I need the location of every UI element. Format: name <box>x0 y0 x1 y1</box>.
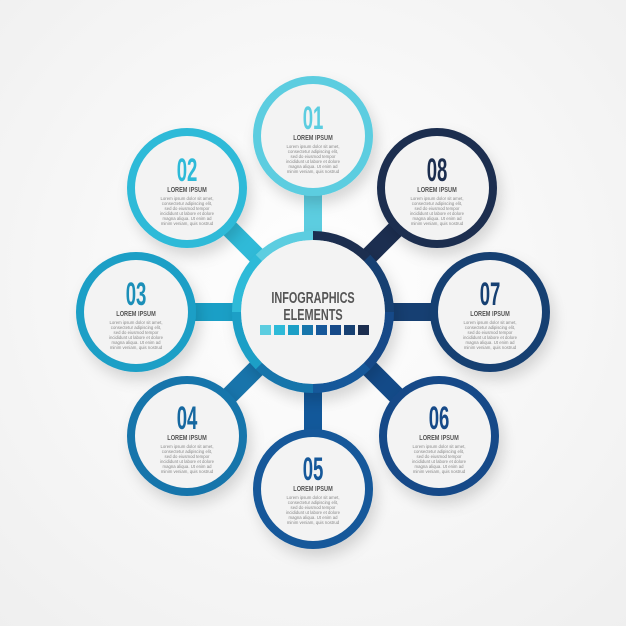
circle 03: magna aliqua. Ut enim ad <box>112 340 161 345</box>
circle 04: consectetur adipiscing elit, <box>162 449 212 454</box>
circle 01: incididunt ut labore et dolore <box>286 159 341 164</box>
circle 04: incididunt ut labore et dolore <box>160 459 215 464</box>
circle 05: sed do eiusmod tempor <box>291 505 336 510</box>
circle 04 <box>127 376 247 496</box>
circle 05: magna aliqua. Ut enim ad <box>289 515 338 520</box>
circle 08: sed do eiusmod tempor <box>415 206 460 211</box>
circle 01 <box>253 76 373 196</box>
segmented ring <box>236 236 390 388</box>
circle 02: minim veniam, quis nostrud <box>161 221 214 226</box>
circle 06: magna aliqua. Ut enim ad <box>415 464 464 469</box>
circle 02: LOREM IPSUM <box>167 186 207 194</box>
color squares <box>260 325 369 335</box>
circle 06: Lorem ipsum dolor sit amet, <box>412 444 466 449</box>
circle 01: LOREM IPSUM <box>293 134 333 142</box>
circle 04: magna aliqua. Ut enim ad <box>163 464 212 469</box>
circle 01: sed do eiusmod tempor <box>291 154 336 159</box>
title: ELEMENTS <box>283 306 343 324</box>
circle 07: minim veniam, quis nostrud <box>464 345 517 350</box>
circle 06: 06 <box>429 400 449 436</box>
circle 03: minim veniam, quis nostrud <box>110 345 163 350</box>
title: INFOGRAPHICS <box>271 289 355 307</box>
circle 03 <box>76 252 196 372</box>
circle 02: incididunt ut labore et dolore <box>160 211 215 216</box>
circle 04: 04 <box>177 400 198 436</box>
circle 07: 07 <box>480 276 500 312</box>
circle 06: LOREM IPSUM <box>419 434 459 442</box>
circle 03: 03 <box>126 276 146 312</box>
circle 05: 05 <box>303 451 323 487</box>
title <box>271 289 355 324</box>
circle 07: magna aliqua. Ut enim ad <box>466 340 515 345</box>
circle 08: consectetur adipiscing elit, <box>412 201 462 206</box>
circle 05: incididunt ut labore et dolore <box>286 510 341 515</box>
circle 08: minim veniam, quis nostrud <box>411 221 464 226</box>
circle 04: sed do eiusmod tempor <box>165 454 210 459</box>
circle 04: minim veniam, quis nostrud <box>161 469 214 474</box>
circle 05 <box>253 429 373 549</box>
circle 05: consectetur adipiscing elit, <box>288 500 338 505</box>
circle 08: magna aliqua. Ut enim ad <box>413 216 462 221</box>
circle 03: LOREM IPSUM <box>116 310 156 318</box>
circle 06 <box>379 376 499 496</box>
circle 01: consectetur adipiscing elit, <box>288 149 338 154</box>
circle 03: Lorem ipsum dolor sit amet, <box>109 320 163 325</box>
circle 01: minim veniam, quis nostrud <box>287 169 340 174</box>
circle 07: sed do eiusmod tempor <box>468 330 513 335</box>
circle 08: Lorem ipsum dolor sit amet, <box>410 196 464 201</box>
circle 01: 01 <box>303 100 323 136</box>
circle 07 <box>430 252 550 372</box>
circle 08: incididunt ut labore et dolore <box>410 211 465 216</box>
circle 08: LOREM IPSUM <box>417 186 457 194</box>
circle 02 <box>127 128 247 248</box>
circle 02: sed do eiusmod tempor <box>165 206 210 211</box>
circle 02: consectetur adipiscing elit, <box>162 201 212 206</box>
circle 03: sed do eiusmod tempor <box>114 330 159 335</box>
circle 03: incididunt ut labore et dolore <box>109 335 164 340</box>
circle 05: LOREM IPSUM <box>293 485 333 493</box>
circle 02: Lorem ipsum dolor sit amet, <box>160 196 214 201</box>
circle 07: incididunt ut labore et dolore <box>463 335 518 340</box>
circle 07: LOREM IPSUM <box>470 310 510 318</box>
circle 08: 08 <box>427 152 447 188</box>
circle 01: magna aliqua. Ut enim ad <box>289 164 338 169</box>
circle 06: consectetur adipiscing elit, <box>414 449 464 454</box>
circle 06: minim veniam, quis nostrud <box>413 469 466 474</box>
circle 03: consectetur adipiscing elit, <box>111 325 161 330</box>
circle 08 <box>377 128 497 248</box>
circle 02: magna aliqua. Ut enim ad <box>163 216 212 221</box>
circle 07: consectetur adipiscing elit, <box>465 325 515 330</box>
circle 05: Lorem ipsum dolor sit amet, <box>286 495 340 500</box>
circle 01: Lorem ipsum dolor sit amet, <box>286 144 340 149</box>
circle 07: Lorem ipsum dolor sit amet, <box>463 320 517 325</box>
circle 06: incididunt ut labore et dolore <box>412 459 467 464</box>
center circle <box>236 236 390 388</box>
circle 05: minim veniam, quis nostrud <box>287 520 340 525</box>
spokes <box>135 134 491 490</box>
circle 06: sed do eiusmod tempor <box>417 454 462 459</box>
circle 02: 02 <box>177 152 197 188</box>
circle 04: LOREM IPSUM <box>167 434 207 442</box>
circle 04: Lorem ipsum dolor sit amet, <box>160 444 214 449</box>
